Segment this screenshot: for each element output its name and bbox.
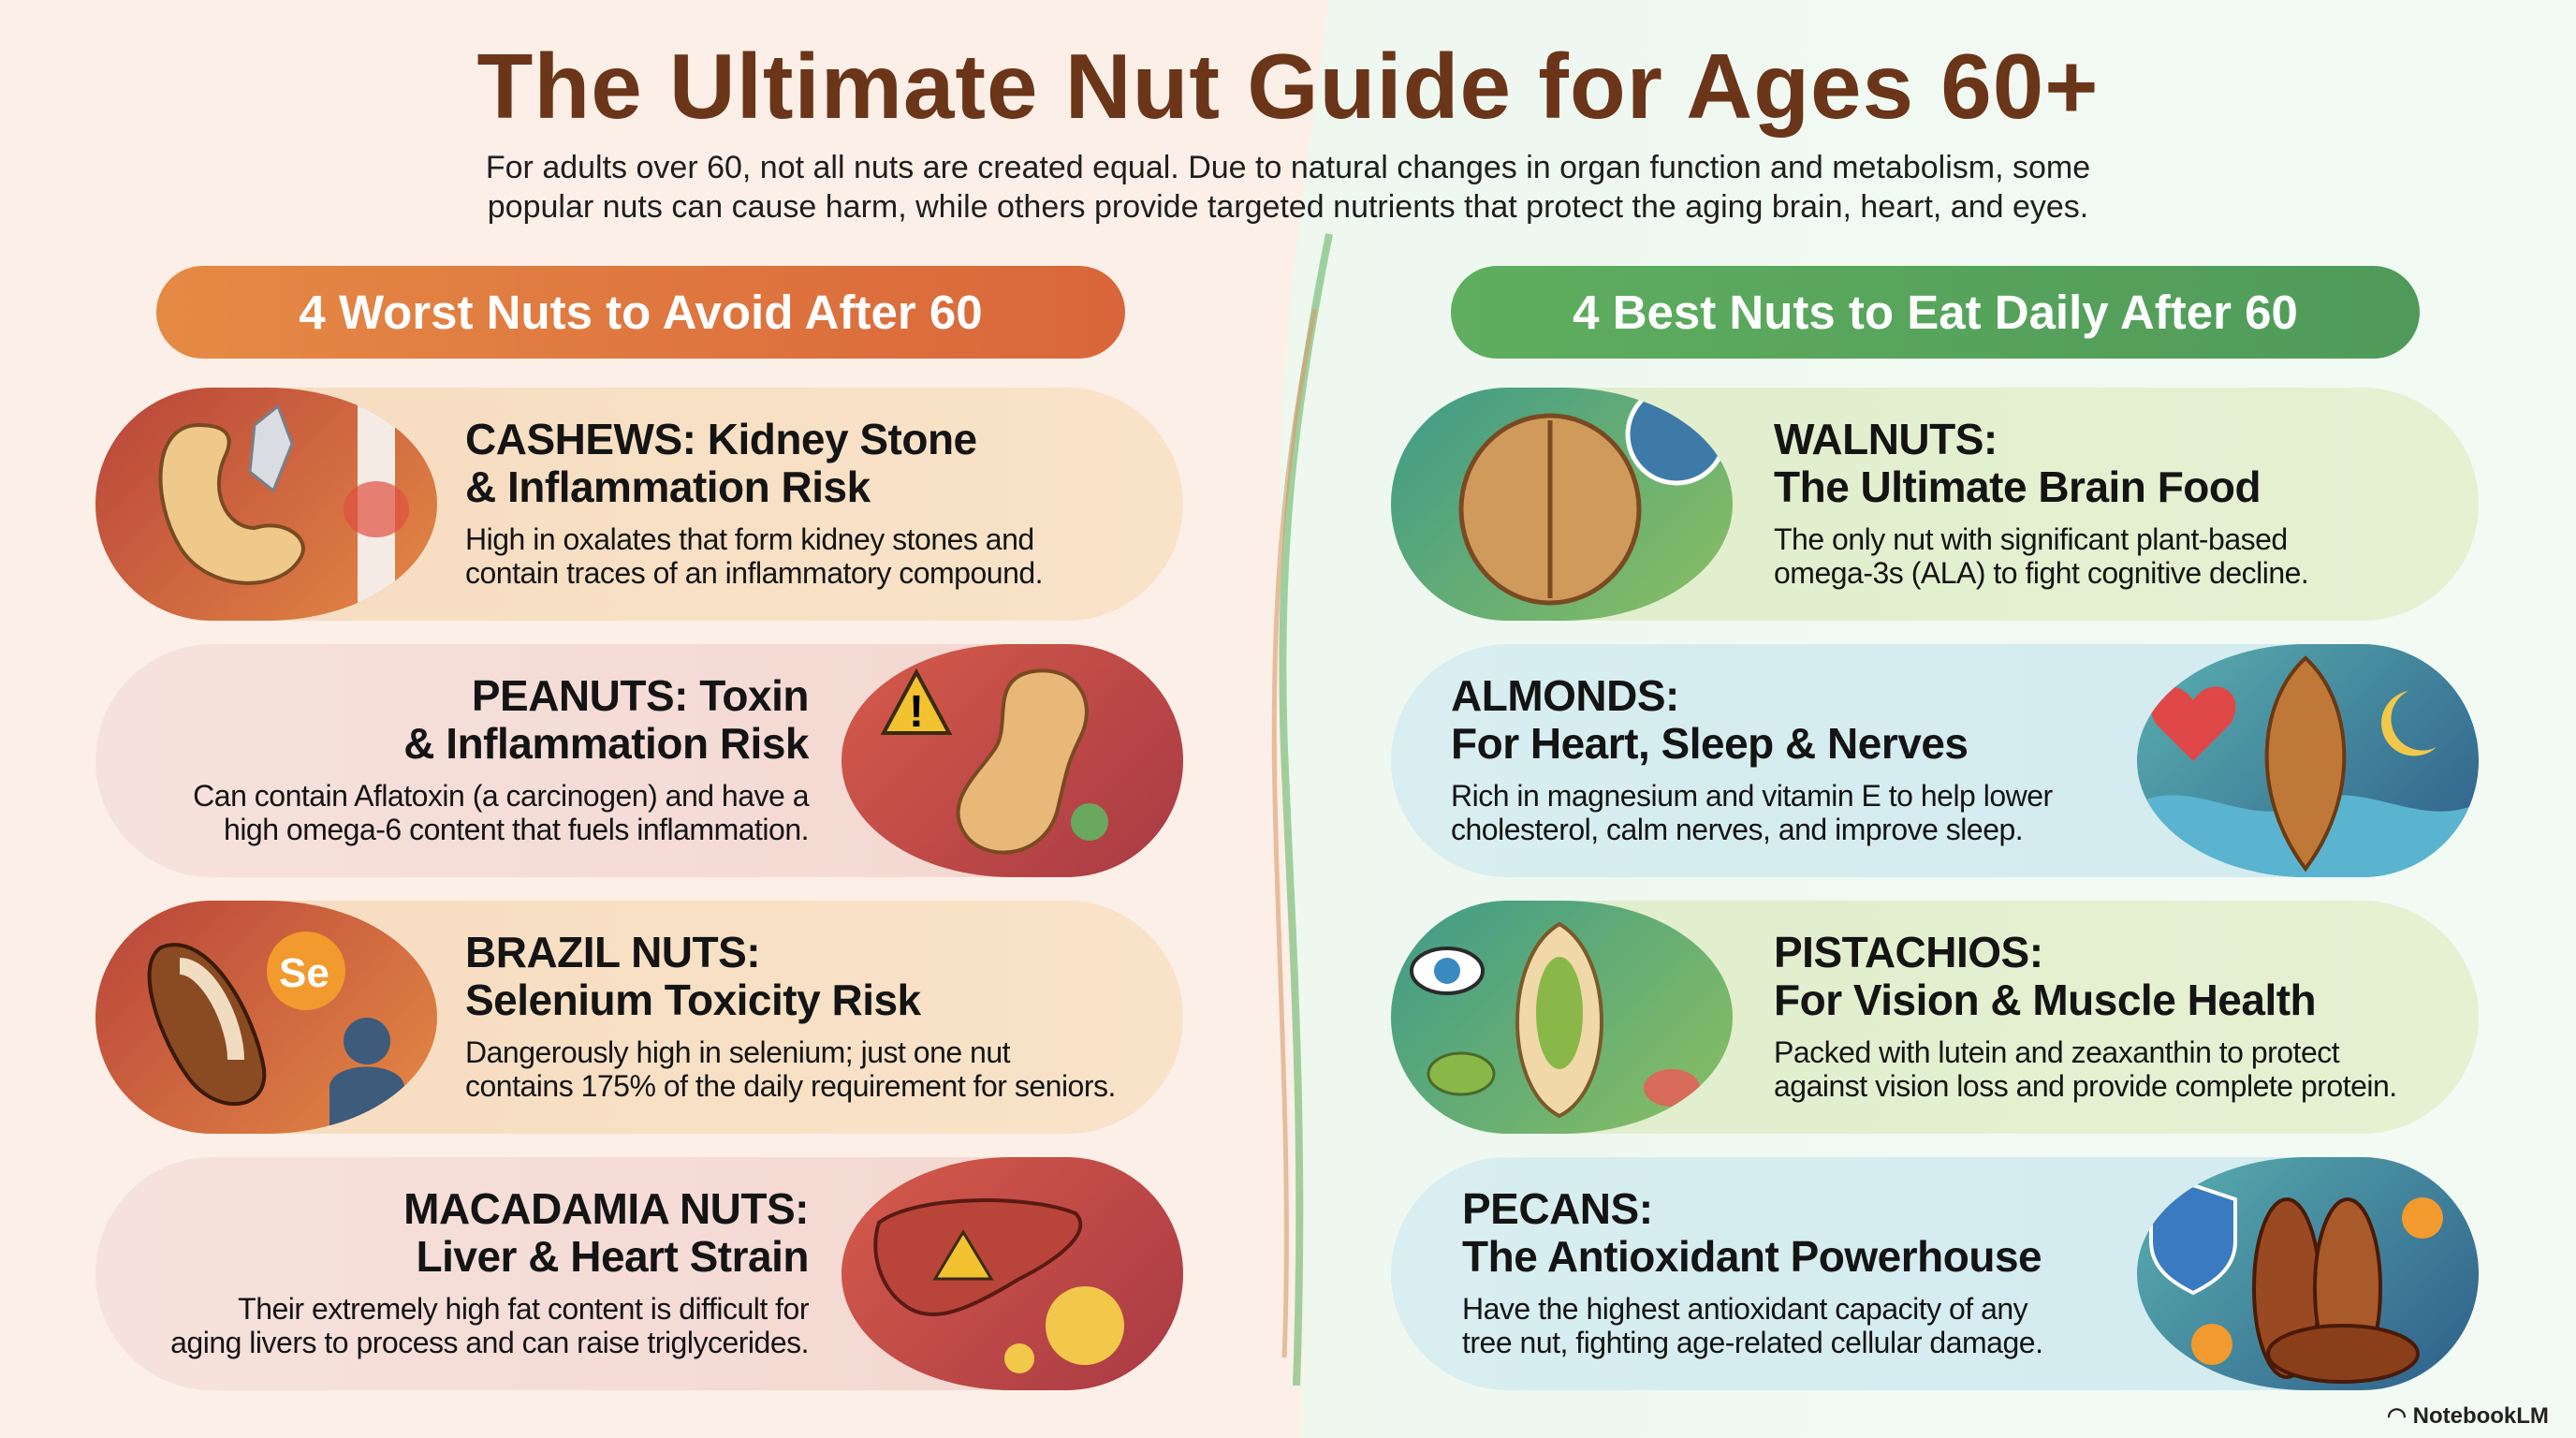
icon: peanut warning bbox=[842, 644, 1183, 877]
text: brazil nuts: contains 175% of the daily requirement for seniors. bbox=[465, 1069, 1116, 1103]
icon: walnut brain bbox=[1391, 388, 1733, 621]
icon: almond heart moon bbox=[2137, 644, 2479, 877]
header: best nuts bbox=[1451, 266, 2420, 359]
icon: peanut warning: ! bbox=[909, 687, 924, 737]
text: walnuts: omega-3s (ALA) to fight cognitive decline. bbox=[1774, 556, 2308, 590]
text: pecans: The Antioxidant Powerhouse bbox=[1462, 1232, 2042, 1281]
text: pistachios: For Vision & Muscle Health bbox=[1774, 976, 2316, 1024]
text: pistachios: PISTACHIOS: bbox=[1774, 928, 2043, 976]
text: pistachios: Packed with lutein and zeaxanthin to protect bbox=[1774, 1035, 2339, 1069]
text: pecans bbox=[1462, 1184, 2042, 1359]
text: macadamia bbox=[170, 1184, 809, 1359]
icon: pistachio eye muscle bbox=[1391, 901, 1733, 1134]
text: peanuts: Can contain Aflatoxin (a carcinogen) and have a bbox=[193, 779, 809, 813]
text: almonds: ALMONDS: bbox=[1451, 671, 1679, 720]
text: walnuts: The Ultimate Brain Food bbox=[1774, 462, 2261, 511]
card: pistachios bbox=[1391, 901, 2479, 1134]
text: macadamia: aging livers to process and can raise triglycerides. bbox=[170, 1326, 809, 1359]
card: macadamia bbox=[95, 1157, 1183, 1390]
text: cashews: CASHEWS: Kidney Stone bbox=[465, 415, 977, 463]
text: pecans: PECANS: bbox=[1462, 1184, 1653, 1233]
text: peanuts bbox=[193, 671, 810, 846]
card: cashews bbox=[95, 388, 1183, 621]
text: brazil nuts: Dangerously high in selenium; just one nut bbox=[465, 1035, 1010, 1069]
header: best nuts: 4 Best Nuts to Eat Daily After 60 bbox=[1573, 286, 2298, 339]
text: almonds: Rich in magnesium and vitamin E to help lower bbox=[1451, 779, 2053, 813]
icon: pecans shield bbox=[2137, 1157, 2479, 1390]
text: macadamia: Their extremely high fat content is difficult for bbox=[238, 1292, 809, 1326]
card: almonds bbox=[1391, 644, 2479, 877]
text: peanuts: & Inflammation Risk bbox=[403, 719, 809, 768]
text: peanuts: high omega-6 content that fuels inflammation. bbox=[224, 813, 809, 846]
header: worst nuts bbox=[156, 266, 1125, 359]
text: cashews: contain traces of an inflammatory compound. bbox=[465, 556, 1043, 590]
text: cashews: High in oxalates that form kidney stones and bbox=[465, 522, 1034, 556]
card: peanuts bbox=[95, 644, 1183, 877]
text: cashews: & Inflammation Risk bbox=[465, 462, 871, 511]
text: pecans: Have the highest antioxidant capacity of any bbox=[1462, 1292, 2027, 1326]
text: walnuts bbox=[1774, 415, 2308, 590]
text: brazil nuts bbox=[465, 928, 1116, 1103]
text: macadamia: MACADAMIA NUTS: bbox=[403, 1184, 809, 1233]
text: brazil nuts: BRAZIL NUTS: bbox=[465, 928, 760, 976]
text: pistachios bbox=[1774, 928, 2397, 1103]
text: pecans: tree nut, fighting age-related cellular damage. bbox=[1462, 1326, 2042, 1359]
subtitle: For adults over 60, not all nuts are created equal. Due to natural changes in organ function and metabolism, some popular nuts can cause harm, while others provide targeted nutrients that protect the aging brain, heart, and eyes. bbox=[486, 150, 2090, 225]
text: pistachios: against vision loss and provide complete protein. bbox=[1774, 1069, 2397, 1103]
icon: cashew and joint bbox=[95, 388, 437, 621]
text: peanuts: PEANUTS: Toxin bbox=[472, 671, 809, 720]
icon: liver and fat bbox=[842, 1157, 1183, 1390]
text: cashews bbox=[465, 415, 1043, 590]
card: pecans bbox=[1391, 1157, 2479, 1390]
text: almonds bbox=[1451, 671, 2053, 846]
text: brazil nuts: Selenium Toxicity Risk bbox=[465, 976, 921, 1024]
text: walnuts: The only nut with significant plant-based bbox=[1774, 522, 2288, 556]
card: walnuts bbox=[1391, 388, 2479, 621]
text: almonds: cholesterol, calm nerves, and improve sleep. bbox=[1451, 813, 2023, 846]
header: worst nuts: 4 Worst Nuts to Avoid After 60 bbox=[299, 286, 983, 339]
icon: brazil nut selenium bbox=[95, 901, 437, 1134]
text: walnuts: WALNUTS: bbox=[1774, 415, 1998, 463]
title: The Ultimate Nut Guide for Ages 60+ bbox=[476, 35, 2100, 138]
logo: NotebookLM: ◠ NotebookLM bbox=[2387, 1403, 2549, 1429]
text: almonds: For Heart, Sleep & Nerves bbox=[1451, 719, 1969, 768]
text: macadamia: Liver & Heart Strain bbox=[417, 1232, 809, 1281]
card: brazil nuts bbox=[95, 901, 1183, 1134]
icon: brazil nut selenium: Se bbox=[279, 950, 329, 996]
